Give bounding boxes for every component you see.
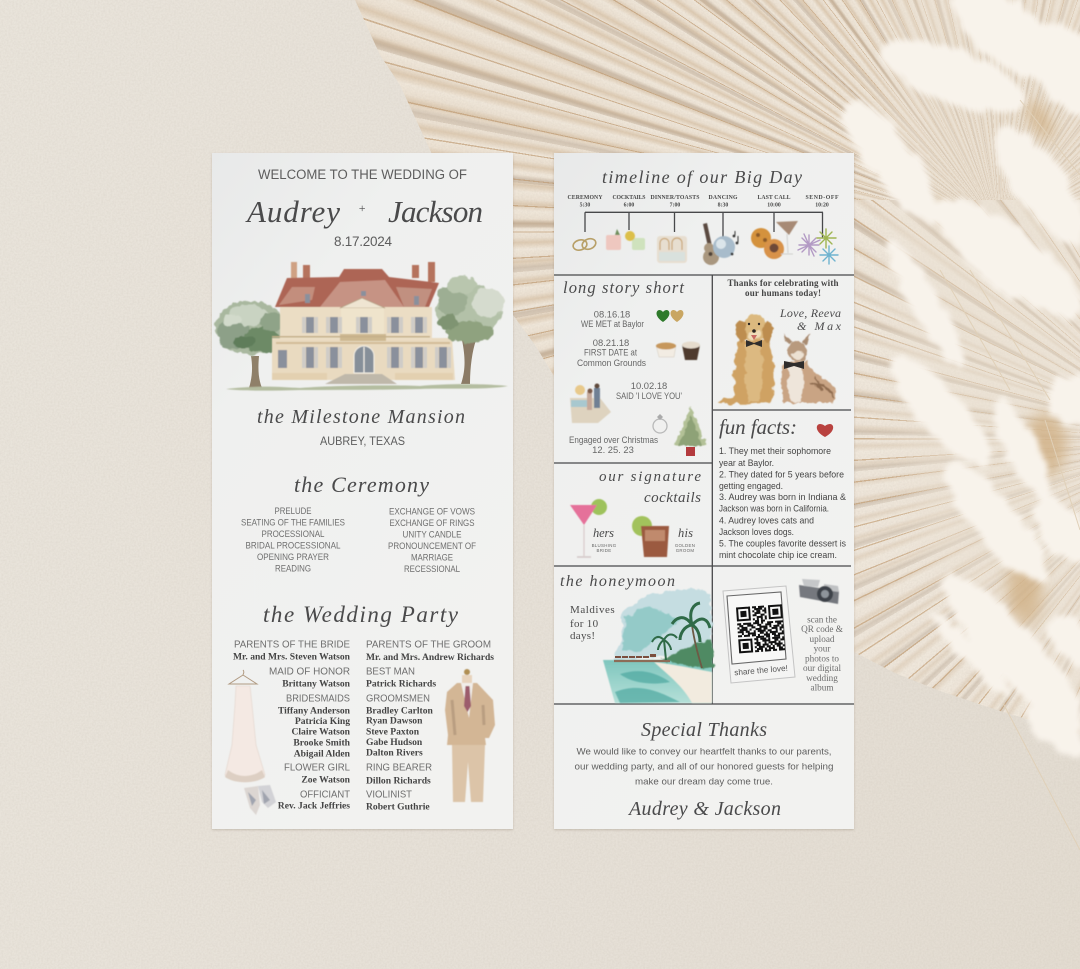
text: ceremony order right: EXCHANGE OF RINGS	[390, 517, 474, 528]
heading: welcome line: WELCOME TO THE WEDDING OF	[258, 167, 467, 182]
icon: golden retriever with bow tie	[717, 315, 773, 404]
panel: fun facts	[719, 415, 846, 560]
text: wedding party bride side: Abigail Alden	[294, 748, 351, 759]
text: wedding party groom side: Mr. and Mrs. Andrew Richards	[366, 652, 494, 663]
background: dried palm leaf upper fan	[355, 0, 1080, 376]
icon: camera	[799, 579, 839, 604]
text: wedding party bride side: Tiffany Anderson	[278, 706, 351, 717]
heading: the honeymoon: the honeymoon	[560, 573, 675, 590]
text: ceremony order right	[388, 506, 476, 574]
text: timeline labels: COCKTAILS	[612, 195, 646, 201]
text: said i love you: SAID 'I LOVE YOU'	[616, 390, 682, 401]
text: hers: hers	[593, 526, 614, 540]
panel: timeline of our big day	[568, 167, 839, 265]
text: thanks for celebrating: Thanks for celebrating with	[728, 278, 838, 288]
panel: pets thanks	[717, 278, 842, 404]
text: ceremony order right: PRONOUNCEMENT OF	[388, 540, 476, 551]
text: venue location: AUBREY, TEXAS	[320, 434, 405, 448]
text: fun facts list: 3. Audrey was born in Indiana &	[719, 492, 846, 502]
text: we met: WE MET at Baylor	[581, 318, 644, 329]
text: wedding party groom side: Dalton Rivers	[366, 748, 423, 759]
icon: fireworks	[798, 229, 838, 264]
text: timeline labels: 5:30	[580, 202, 590, 208]
text: thanks for celebrating: our humans today!	[745, 288, 821, 298]
icon: green and gold hearts	[657, 310, 683, 322]
text: maldives: Maldives	[570, 604, 615, 616]
text: we met	[581, 309, 644, 329]
text: scan instructions	[801, 615, 843, 693]
heading: the wedding party: the Wedding Party	[263, 602, 459, 627]
text: thanks for celebrating	[728, 278, 838, 298]
text: fun facts list: mint chocolate chip ice cream.	[719, 550, 837, 560]
heading: our signature cocktails: cocktails	[644, 490, 701, 506]
panel: long story short	[563, 278, 707, 456]
text: ceremony order right: MARRIAGE	[411, 552, 453, 563]
text: timeline labels: 6:00	[624, 202, 634, 208]
text: timeline labels: 8:30	[718, 202, 728, 208]
text: timeline labels: 10:20	[815, 202, 829, 208]
text: thanks message	[574, 746, 834, 787]
text: ceremony order left: BRIDAL PROCESSIONAL	[246, 540, 340, 551]
text: timeline labels	[568, 195, 839, 208]
text: wedding party groom side: GROOMSMEN	[366, 693, 430, 704]
text: wedding party groom side: Gabe Hudson	[366, 737, 423, 748]
text: hers	[592, 526, 617, 553]
heading: our signature cocktails	[599, 469, 701, 506]
text: first date	[577, 337, 646, 368]
text: first date: 08.21.18	[593, 337, 629, 348]
text: timeline labels: CEREMONY	[568, 195, 603, 201]
illustration: maldives beach watercolor	[603, 588, 714, 703]
text: wedding party bride side: Mr. and Mrs. Steven Watson	[233, 651, 351, 662]
icon: cat with bow tie	[782, 334, 836, 403]
text: wedding party groom side: BEST MAN	[366, 667, 415, 678]
text: his: GROOM	[676, 548, 694, 553]
text: said i love you: 10.02.18	[631, 380, 667, 391]
icon: coffee cups	[656, 342, 700, 360]
heading: fun facts: fun facts:	[719, 415, 797, 439]
text: ceremony order left: OPENING PRAYER	[257, 551, 329, 562]
text: scan instructions: scan the	[807, 615, 837, 625]
text: wedding party bride side: OFFICIANT	[300, 789, 351, 800]
text: wedding party groom side: Dillon Richards	[366, 775, 431, 786]
text: wedding party groom side: Steve Paxton	[366, 726, 420, 737]
text: thanks message: our wedding party, and all of our honored guests for helping	[574, 761, 834, 772]
text: thanks message: We would like to convey our heartfelt thanks to our parents,	[576, 746, 832, 757]
heading: our signature cocktails: our signature	[599, 469, 701, 485]
text: couple signature: Audrey & Jackson	[627, 798, 781, 820]
text: fun facts list: year at Baylor.	[719, 458, 774, 468]
text: we met: 08.16.18	[594, 309, 630, 320]
text: ceremony order left: SEATING OF THE FAMILIES	[241, 516, 345, 527]
text: wedding party bride side: Zoe Watson	[301, 774, 351, 785]
text: fun facts list: 2. They dated for 5 years before	[719, 470, 844, 480]
text: timeline labels: DANCING	[708, 195, 738, 201]
text: fun facts list: getting engaged.	[719, 481, 783, 491]
text: maldives	[570, 604, 615, 642]
icon: tan suit on mannequin	[445, 669, 495, 802]
text: wedding party bride side	[233, 640, 351, 811]
text: wedding party bride side: FLOWER GIRL	[284, 762, 350, 773]
text: wedding date: 8.17.2024	[334, 234, 392, 249]
text: wedding party bride side: Patricia King	[295, 716, 350, 727]
grid lines	[554, 275, 854, 704]
heading: venue name: the Milestone Mansion	[257, 406, 465, 428]
text: ceremony order left: READING	[275, 562, 311, 573]
text: maldives: for 10	[570, 618, 599, 630]
text: scan instructions: album	[811, 683, 833, 693]
text: pet signature: & Max	[797, 319, 842, 333]
panel: right program card	[554, 153, 854, 829]
text: scan instructions: photos to	[805, 653, 839, 663]
text: hers: BRIDE	[597, 548, 611, 553]
text: wedding party bride side: Rev. Jack Jeffries	[278, 800, 350, 811]
background: dried palm leaf lower fan	[854, 200, 1080, 718]
text: wedding party groom side: Ryan Dawson	[366, 716, 423, 727]
text: wedding party groom side: PARENTS OF THE GROOM	[366, 640, 491, 651]
text: ceremony order left	[241, 505, 345, 573]
icon: cookies and espresso martini	[751, 221, 798, 259]
text: engaged: Engaged over Christmas	[569, 434, 658, 445]
text: ceremony order left: PROCESSIONAL	[262, 528, 324, 539]
icon: cocktails	[606, 229, 645, 250]
icon: christmas tree	[674, 407, 707, 456]
text: wedding party groom side: Robert Guthrie	[366, 801, 430, 812]
text: ceremony order left: PRELUDE	[274, 505, 312, 516]
text: fun facts list: 5. The couples favorite dessert is	[719, 539, 846, 549]
icon: left tree	[215, 301, 285, 388]
text: wedding party bride side: Claire Watson	[291, 727, 351, 738]
heading: long story short: long story short	[563, 278, 684, 297]
text: ceremony order right: RECESSIONAL	[404, 563, 460, 574]
chart: timeline bar	[585, 212, 823, 238]
text: pet signature: Love, Reeva	[779, 306, 841, 320]
panel: qr share	[723, 579, 843, 693]
icon: right tree	[436, 276, 504, 384]
panel: signature cocktails	[570, 469, 701, 557]
text: scan instructions: upload	[809, 634, 835, 644]
icon: engagement ring	[653, 414, 667, 433]
heading: couple names: Audrey	[245, 194, 340, 229]
text: wedding party groom side: Bradley Carlton	[366, 705, 434, 716]
icon: wedding dress on hanger	[225, 670, 265, 782]
icon: bridal shoes	[244, 785, 276, 815]
text: timeline labels: 7:00	[670, 202, 680, 208]
text: wedding party bride side: Brooke Smith	[293, 738, 351, 749]
icon: red heart	[817, 424, 833, 437]
text: wedding party bride side: Brittany Watson	[282, 679, 351, 690]
heading: couple names: +	[358, 201, 366, 215]
icon: polaroid qr code: share the love!	[734, 664, 788, 677]
text: wedding party groom side: RING BEARER	[366, 763, 432, 774]
text: pet signature	[779, 306, 842, 333]
icon: lawn	[226, 384, 508, 391]
heading: the ceremony: the Ceremony	[294, 472, 429, 497]
background: pampas grass	[827, 0, 1080, 850]
panel: the honeymoon	[560, 573, 714, 703]
text: engaged: 12. 25. 23	[592, 444, 634, 455]
icon: old fashioned	[632, 516, 669, 557]
text: hers: BLUSHING	[592, 543, 617, 548]
text: engaged	[569, 434, 658, 455]
windows	[278, 291, 447, 368]
text: fun facts list: 1. They met their sophomore	[719, 446, 831, 456]
panel: left program card	[212, 153, 513, 829]
text: timeline labels: 10:00	[767, 202, 781, 208]
text: timeline labels: LAST CALL	[758, 195, 791, 201]
text: wedding party groom side: Patrick Richards	[366, 679, 436, 690]
text: wedding party groom side: VIOLINIST	[366, 790, 413, 801]
text: fun facts list	[719, 446, 846, 560]
heading: couple names	[245, 194, 483, 229]
text: timeline labels: SEND-OFF	[806, 195, 839, 201]
text: scan instructions: our digital	[803, 663, 841, 673]
text: scan instructions: QR code &	[801, 624, 843, 634]
text: scan instructions: wedding	[806, 673, 838, 683]
icon: couple on beach	[570, 384, 611, 423]
heading: couple names: Jackson	[388, 194, 483, 229]
text: maldives: days!	[570, 630, 595, 642]
text: ceremony order right: UNITY CANDLE	[402, 529, 462, 540]
text: his: GOLDEN	[675, 543, 695, 548]
text: wedding party bride side: MAID OF HONOR	[269, 666, 350, 677]
text: wedding party bride side: PARENTS OF THE BRIDE	[234, 640, 350, 651]
text: first date: Common Grounds	[577, 357, 646, 368]
icon: pink martini	[570, 499, 607, 557]
text: his: his	[678, 526, 693, 540]
text: fun facts list: Jackson was born in California.	[719, 504, 829, 514]
text: thanks message: make our dream day come true.	[635, 776, 773, 787]
text: fun facts list: Jackson loves dogs.	[719, 527, 794, 537]
panel: special thanks	[574, 719, 834, 820]
text: said i love you	[616, 380, 682, 401]
text: first date: FIRST DATE at	[584, 346, 637, 358]
text: wedding party bride side: BRIDESMAIDS	[286, 694, 350, 705]
icon: wedding rings	[572, 237, 597, 252]
text: wedding party groom side	[366, 640, 494, 812]
text: his	[675, 526, 695, 553]
heading: timeline: timeline of our Big Day	[602, 167, 802, 187]
text: timeline labels: DINNER/TOASTS	[650, 195, 700, 201]
heading: special thanks: Special Thanks	[641, 719, 767, 741]
text: ceremony order right: EXCHANGE OF VOWS	[389, 506, 475, 517]
icon: guitar, disco ball and notes	[703, 223, 738, 265]
text: scan instructions: your	[814, 644, 830, 654]
illustration: watercolor mansion	[215, 262, 508, 391]
text: fun facts list: 4. Audrey loves cats and	[719, 515, 814, 525]
icon: mansion building	[272, 262, 455, 384]
icon: dinner place settings	[657, 236, 687, 263]
